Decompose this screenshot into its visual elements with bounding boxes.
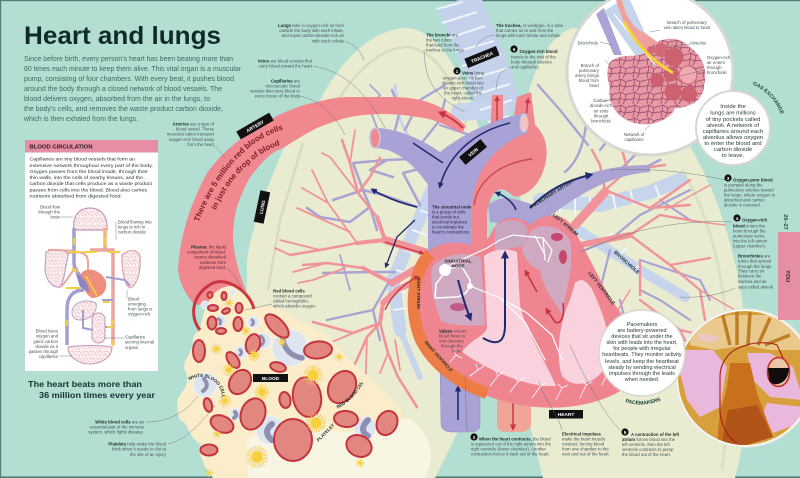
label: sinoatrial node: NODE [451, 264, 465, 268]
platelets [206, 300, 363, 476]
step 6: oxygen-rich blood: 6 [513, 47, 516, 52]
alveoli labels: through [594, 114, 609, 118]
note: arteries: muscular tubes transport [167, 132, 215, 136]
note: bronchi: are [451, 32, 459, 38]
vessels [74, 228, 85, 279]
trachea and bronchi [392, 0, 685, 377]
label: blood tag: BLOOD [262, 376, 280, 382]
note: veins: are blood vessels that [269, 58, 313, 64]
note: electrical impulses: from one chamber to the [562, 446, 609, 452]
intro text: Since before birth, every person's heart has been beating more than [24, 56, 233, 63]
diagram labels: oxygen-rich [128, 312, 151, 316]
note: sinoatrial node: heart's contractions. [432, 230, 470, 234]
note: bronchi: trachea to the lungs [426, 48, 464, 52]
step 6: oxygen-rich blood: and capillaries [511, 64, 538, 70]
step 2: heart contracts [470, 433, 552, 456]
label: white blood cell: WHITE BLOOD CELL [188, 374, 225, 398]
valves [551, 233, 563, 241]
note: arteries: are a type of [189, 122, 215, 126]
note: lungs: and expel carbon-dioxide-rich air [282, 33, 345, 38]
red blood cells [193, 292, 401, 461]
lung capillaries [45, 250, 68, 287]
step 4: oxygen-rich blood enters: Oxygen-rich [742, 218, 767, 222]
intro text: pump, consisting of four chambers. With every beat, it pushes blood [24, 76, 234, 83]
note: trachea: that carries air to and from the [496, 28, 554, 33]
step 5: left atrium contraction: forces blood into the [635, 437, 676, 442]
alveoli labels: Carbon- [593, 98, 609, 103]
step 4: oxygen-rich blood enters: (upper chamber). [733, 244, 766, 248]
step 6: oxygen-rich blood: body through arteries [511, 60, 552, 64]
alveoli labels: air exits [594, 108, 608, 114]
tag: vein [459, 139, 487, 165]
diagram labels: Blood flow [40, 204, 61, 210]
step 4: oxygen-rich blood enters: pulmonary veins, [733, 234, 765, 238]
tag: lung: LUNG [259, 200, 267, 214]
chapter tab: YOU [784, 270, 790, 282]
step 2: heart contracts: the blood [532, 436, 551, 442]
step 4: oxygen-rich blood enters: heart through the [733, 228, 766, 234]
step 2: heart contracts: 2 [473, 435, 476, 440]
note: platelets: help make the blood [126, 442, 167, 446]
note: valves: through the [441, 344, 463, 348]
note: electrical impulses: next and out of the heart. [562, 452, 610, 456]
step 5: left atrium contraction: atrium [622, 437, 635, 442]
note: plasma: carries dissolved [194, 254, 227, 260]
alveoli side labels: heart [589, 83, 600, 88]
step 4: oxygen-rich blood enters: into the left atrium [733, 238, 768, 244]
step 2: heart contracts: When the heart contracts, [479, 436, 532, 442]
step 2: heart contracts: is squeezed out of the right atrium into the [471, 442, 552, 446]
callout: gas exchange: Inside the [720, 104, 746, 110]
vena cava [375, 113, 527, 257]
note: white blood cells: system, which fights disease. [88, 430, 144, 434]
step 3: oxygen-poor blood: pulmonary arteries toward [724, 188, 774, 192]
callout: gas exchange: alveoli. A network of [707, 123, 759, 129]
diagram labels: emerging [128, 302, 147, 306]
note: platelets: thick when it needs to clot at [112, 446, 167, 452]
note: bronchioles: sacs called alveoli. [738, 284, 774, 290]
tag: artery: ARTERY [246, 119, 266, 134]
right lung arteries [575, 150, 735, 370]
step 2: heart contracts: contraction forces it back out of the heart. [471, 452, 550, 456]
lungs [245, 28, 748, 478]
panel text: Capillaries are tiny blood vessels that form an [30, 156, 135, 162]
step 4: oxygen-rich blood enters [733, 214, 768, 248]
step 3: oxygen-poor blood: absorbed and carbon [724, 198, 765, 202]
label: platelet: PLATELET [316, 423, 336, 443]
note: capillaries: Capillaries [271, 78, 293, 84]
callout: gas exchange: lungs are millions [710, 110, 756, 116]
left ventricle chamber [559, 280, 609, 384]
note: valves: one direction [439, 338, 464, 344]
callout: pacemakers: levels, and keep the heartbeat [605, 359, 679, 365]
note: arteries: Arteries [173, 122, 190, 126]
note: valves: ensure [452, 328, 467, 334]
note: electrical impulses: make the heart muscle [562, 436, 606, 442]
aortic root chamber [495, 220, 527, 250]
callout: pacemakers: for people with irregular [613, 346, 671, 352]
note: sinoatrial node: The sinoatrial node [432, 204, 472, 210]
callout: pacemakers: Pacemakers [627, 322, 658, 328]
chapter tab [778, 232, 800, 320]
heading: pacemakers: PACEMAKERS [626, 398, 660, 405]
note: capillaries: vessels that carry blood to [250, 88, 301, 94]
brain capillaries [74, 208, 107, 230]
panel text: Oxygen passes from the blood inside, through their [30, 169, 148, 175]
label: bronchiole: BRONCHIOLE [612, 250, 641, 276]
panel text: passes from cells into the blood. Blood also carries [30, 187, 148, 193]
note: red blood cells: Red blood cells [273, 288, 305, 294]
step 4: oxygen-rich blood enters: blood [733, 224, 745, 228]
note: sinoatrial node: that sends out [432, 214, 460, 220]
callout: gas exchange: to leave. [722, 153, 744, 159]
alveoli side labels: blood from [579, 78, 599, 83]
panel: blood circulation [25, 140, 158, 371]
callout: pacemakers: when needed. [624, 377, 660, 383]
callout: gas exchange [695, 82, 784, 166]
note: valves: heart [452, 348, 463, 354]
callout: pacemakers: heartbeats. They monitor activity [602, 352, 682, 358]
heart beat fact: 36 million times every year [39, 390, 156, 400]
curved and rotated anatomy labels [416, 178, 641, 373]
note: plasma: nutrients from [200, 260, 226, 265]
left atrium chamber [522, 226, 571, 315]
black label tags [236, 46, 583, 419]
tag: heart [549, 410, 583, 418]
label: right ventricle: RIGHT VENTRICLE [423, 340, 454, 373]
callout: gas exchange: alveolus allows oxygen [703, 135, 763, 141]
callout: pacemakers: skin with leads into the heart, [607, 340, 678, 346]
note: bronchi: that lead from the [426, 42, 460, 48]
step 5: left atrium contraction: 5 [624, 430, 627, 435]
note: bronchioles: trachea and air [738, 279, 767, 284]
left lung arteries [275, 130, 425, 407]
panel heading [25, 140, 158, 152]
arrow [441, 113, 463, 128]
diagram heart [82, 270, 106, 298]
diagram labels: serving internal [125, 340, 154, 344]
diagram labels: from lungs is [128, 306, 152, 312]
yellow flow marks [66, 238, 120, 346]
note: plasma: Plasma: [191, 244, 208, 250]
step 1: veins: oxygen-poor, carbon- [443, 76, 484, 80]
lower body vessels [440, 365, 531, 432]
callout: gas exchange: capillaries around each [703, 129, 763, 135]
alveoli side labels: artery brings [575, 73, 599, 78]
diagram labels: oxygen and [36, 334, 59, 338]
callout: pacemakers [598, 309, 686, 405]
diagram labels [29, 204, 154, 359]
diagram labels: Blood loses [36, 328, 58, 334]
note: sinoatrial node: to coordinate the [432, 224, 465, 230]
diagram labels: Blood [128, 296, 140, 302]
diagram labels: lungs is rich in [118, 224, 146, 230]
step 3: oxygen-poor blood: Oxygen-poor blood [733, 178, 773, 182]
note: plasma: component of blood, [187, 250, 226, 254]
note: trachea: lungs with each inhale and exhale [496, 33, 561, 38]
note: valves: blood flows in [439, 334, 466, 338]
panel text: carbon dioxide that cells produce as a waste product [30, 181, 153, 187]
alveoli labels: bronchiole [591, 118, 612, 124]
note: white blood cells: essential part of the immune [90, 424, 145, 430]
callout: gas exchange: to enter the blood and [704, 141, 762, 147]
tag: lung [254, 190, 270, 224]
diagram labels: gains carbon [33, 339, 59, 344]
circulation diagram [45, 208, 140, 364]
note: valves: Valves [439, 328, 453, 334]
pink artery band with fact [178, 97, 466, 305]
tag: artery [236, 113, 274, 139]
note: trachea: The trachea, [496, 23, 521, 28]
photo: pacemaker x-ray [670, 305, 800, 450]
alveoli labels: Bronchiole [578, 40, 599, 46]
panel text: nutrients absorbed from digested food. [30, 194, 122, 200]
step 1: veins: an upper chamber of [443, 86, 484, 90]
note: lungs: Lungs [278, 23, 292, 28]
step 3: oxygen-poor blood: 3 [727, 176, 730, 181]
alveoli side labels [575, 55, 731, 88]
step 3: oxygen-poor blood: is pumped along the [724, 182, 763, 188]
note: electrical impulses: contract, forcing blood [562, 442, 605, 446]
airflow arrows [614, 14, 655, 65]
note: bronchioles: tubes that spread [738, 258, 772, 264]
diagram labels: brain [50, 214, 61, 220]
step 6: oxygen-rich blood: Oxygen-rich blood [520, 49, 558, 54]
alveoli labels: Alveolus [690, 40, 706, 46]
intro text: 60 times each minute to keep them alive. This vital organ is a muscular [24, 66, 242, 73]
alveoli side labels: air enters [707, 60, 725, 65]
alveoli labels [578, 20, 711, 142]
alveoli side labels: Oxygen-rich [707, 55, 731, 60]
tag: trachea [464, 46, 500, 68]
heart beat fact: The heart beats more than [28, 379, 142, 389]
alveoli cluster [607, 39, 705, 124]
tag: trachea: TRACHEA [470, 51, 495, 65]
note: arteries: from the heart [187, 142, 215, 147]
step 1: veins: 1 [456, 69, 459, 74]
alveoli labels: vein takes blood to heart [664, 25, 711, 30]
callout: pacemakers: impulses through the leads [609, 371, 675, 377]
note: lungs: outside the body with each inhale, [279, 28, 344, 33]
step 1: veins [442, 67, 485, 100]
callout: gas exchange: carbon dioxide [714, 147, 753, 153]
page number: 26–27 [782, 214, 788, 230]
step 5: left atrium contraction: left ventricle, then the left [622, 442, 671, 447]
diagram labels: Capillaries [125, 334, 145, 340]
white blood cells [193, 289, 376, 444]
note: red blood cells: contain a compound [273, 294, 312, 298]
vessels into alveoli [596, 8, 622, 55]
step 5: left atrium contraction: the blood out of the heart. [622, 452, 671, 457]
organ capillaries [72, 301, 96, 320]
step 5: left atrium contraction: A contraction of the left [631, 432, 680, 437]
note: bronchioles: Bronchioles [738, 254, 763, 258]
step 1: veins: dioxide-rich blood into [442, 80, 485, 86]
note: capillaries: are [293, 78, 301, 84]
step 3: oxygen-poor blood: the lungs, where oxygen is [724, 192, 775, 198]
label: pulmonary artery: PULMONARY ARTERY [529, 178, 577, 210]
step 6: oxygen-rich blood: travels to the rest of the [511, 54, 557, 60]
label: left atrium: LEFT ATRIUM [551, 213, 579, 237]
blood cells magnified [177, 280, 431, 478]
step 4: oxygen-rich blood enters: 4 [736, 216, 739, 221]
diagram labels: carbon dioxide [118, 230, 147, 234]
heart [370, 92, 650, 408]
note: veins: carry blood toward the heart [258, 64, 313, 68]
note: red blood cells: called hemoglobin, [273, 298, 309, 304]
diagram labels: Blood flowing into [118, 220, 152, 224]
panel text: thin walls, into the cells of nearby tissues, and the [30, 175, 143, 181]
note: arteries: blood vessel. These [176, 126, 215, 132]
note: bronchioles: are [763, 254, 771, 258]
step 1: veins: Veins [462, 70, 474, 76]
step 3: oxygen-poor blood: dioxide is removed. [724, 202, 761, 208]
note: platelets: the site of an injury [130, 452, 167, 457]
heart wall [412, 215, 629, 408]
note: capillaries: every tissue of the body [255, 94, 301, 98]
note: arteries: oxygen-rich blood away [169, 137, 215, 142]
tag: vein: VEIN [467, 147, 480, 159]
blood vessel branches in the lungs [275, 85, 735, 407]
note: white blood cells: White blood cells [95, 420, 131, 424]
right lung veins [538, 85, 660, 172]
step 2: heart contracts: right ventricle (lower chamber). Another [471, 446, 547, 452]
heading: gas exchange: GAS EXCHANGE [753, 82, 784, 114]
band text second line: in just one drop of blood [210, 140, 280, 210]
note: white blood cells: are an [131, 420, 145, 424]
alveoli side labels: bronchiole [707, 70, 727, 75]
note: bronchioles: between the [738, 274, 762, 278]
label: left ventricle: LEFT VENTRICLE [586, 271, 617, 307]
right ventricle chamber [462, 249, 556, 386]
step 1: veins: bring [473, 70, 485, 76]
alveoli labels: Branch of pulmonary [667, 20, 708, 25]
aorta [452, 92, 547, 255]
note: plasma: the liquid [208, 244, 227, 250]
panel text: extensive network throughout every part of the body. [30, 163, 153, 169]
note: sinoatrial node: electrical impulses [432, 220, 467, 224]
alveoli labels: dioxide-rich [590, 103, 613, 108]
blood plasma mass [177, 286, 405, 478]
callout: pacemakers: are battery-powered [617, 328, 667, 334]
step 4: oxygen-rich blood enters: enters the [745, 224, 766, 228]
note: capillaries: microscopic blood [266, 84, 301, 88]
step 5: left atrium contraction: ventricle contracts to pump [622, 447, 674, 452]
intro text: around the body through a closed network of blood vessels. The [24, 86, 222, 93]
diagram labels: capillaries [39, 354, 58, 359]
panel heading: BLOOD CIRCULATION [30, 144, 92, 150]
callout: pacemakers: steady by sending electrical [608, 365, 676, 371]
label: right atrium: RIGHT ATRIUM [416, 277, 421, 309]
callout: alveoli detail circle [567, 0, 733, 155]
intro text: the body's cells, and removes the waste product carbon dioxide, [24, 106, 223, 113]
title: Heart and lungs [24, 22, 221, 50]
diagram labels: passes through [29, 349, 59, 354]
tag: heart: HEART [558, 412, 574, 418]
alveoli side labels: pulmonary [579, 68, 600, 73]
band text: There are 5 million red blood cells [194, 126, 283, 220]
note: trachea: or windpipe, is a tube [521, 23, 564, 28]
step 5: left atrium contraction [621, 428, 680, 457]
note: lungs: with each exhale [312, 38, 345, 44]
note: veins: Veins [258, 58, 270, 64]
note: bronchioles: They carry air [738, 268, 765, 274]
note: red blood cells: which absorbs oxygen [273, 304, 316, 308]
note: electrical impulses: Electrical impulses [562, 432, 602, 436]
note: lungs: take in oxygen-rich air from [291, 23, 344, 28]
note: bronchioles: through the lungs. [738, 264, 772, 269]
intro text: blood delivers oxygen, absorbed from the air in the lungs, to [24, 96, 210, 103]
alveoli side labels: through [707, 65, 722, 70]
note: sinoatrial node: is a group of cells [432, 210, 465, 214]
intro text: which is then exhaled from the lungs. [23, 116, 138, 123]
label: sinoatrial node: SINOATRIAL [444, 258, 472, 264]
right atrium chamber [431, 254, 485, 326]
muscle band [414, 254, 487, 393]
step 3: oxygen-poor blood [724, 174, 775, 208]
pale tissue [247, 418, 431, 478]
note: bronchi: The bronchi [426, 32, 451, 38]
diagram labels: organs [125, 345, 138, 350]
alveoli labels: Network of [624, 132, 645, 137]
callout: pacemakers: devices that sit under the [611, 334, 673, 340]
diagram labels: through the [38, 210, 61, 214]
step 1: veins: right atrium. [452, 96, 474, 100]
note: plasma: digested food. [199, 265, 226, 270]
alveoli labels: capillaries [624, 137, 644, 142]
leader lines [146, 35, 735, 444]
step 6: oxygen-rich blood [510, 45, 558, 70]
pulmonary artery [488, 165, 650, 228]
diagram labels: dioxide as it [35, 344, 59, 349]
nerve pathways [435, 235, 614, 400]
step 1: veins: the heart, called the [444, 90, 482, 96]
callout: gas exchange: of tiny pockets called [706, 117, 760, 123]
label: blood tag [253, 374, 288, 382]
chamber arrows [373, 190, 563, 342]
note: bronchi: the two tubes [426, 38, 452, 42]
alveoli side labels: Branch of [581, 63, 600, 68]
label: red blood cell: RED BLOOD CELL [336, 382, 364, 409]
note: platelets: Platelets [108, 442, 127, 446]
